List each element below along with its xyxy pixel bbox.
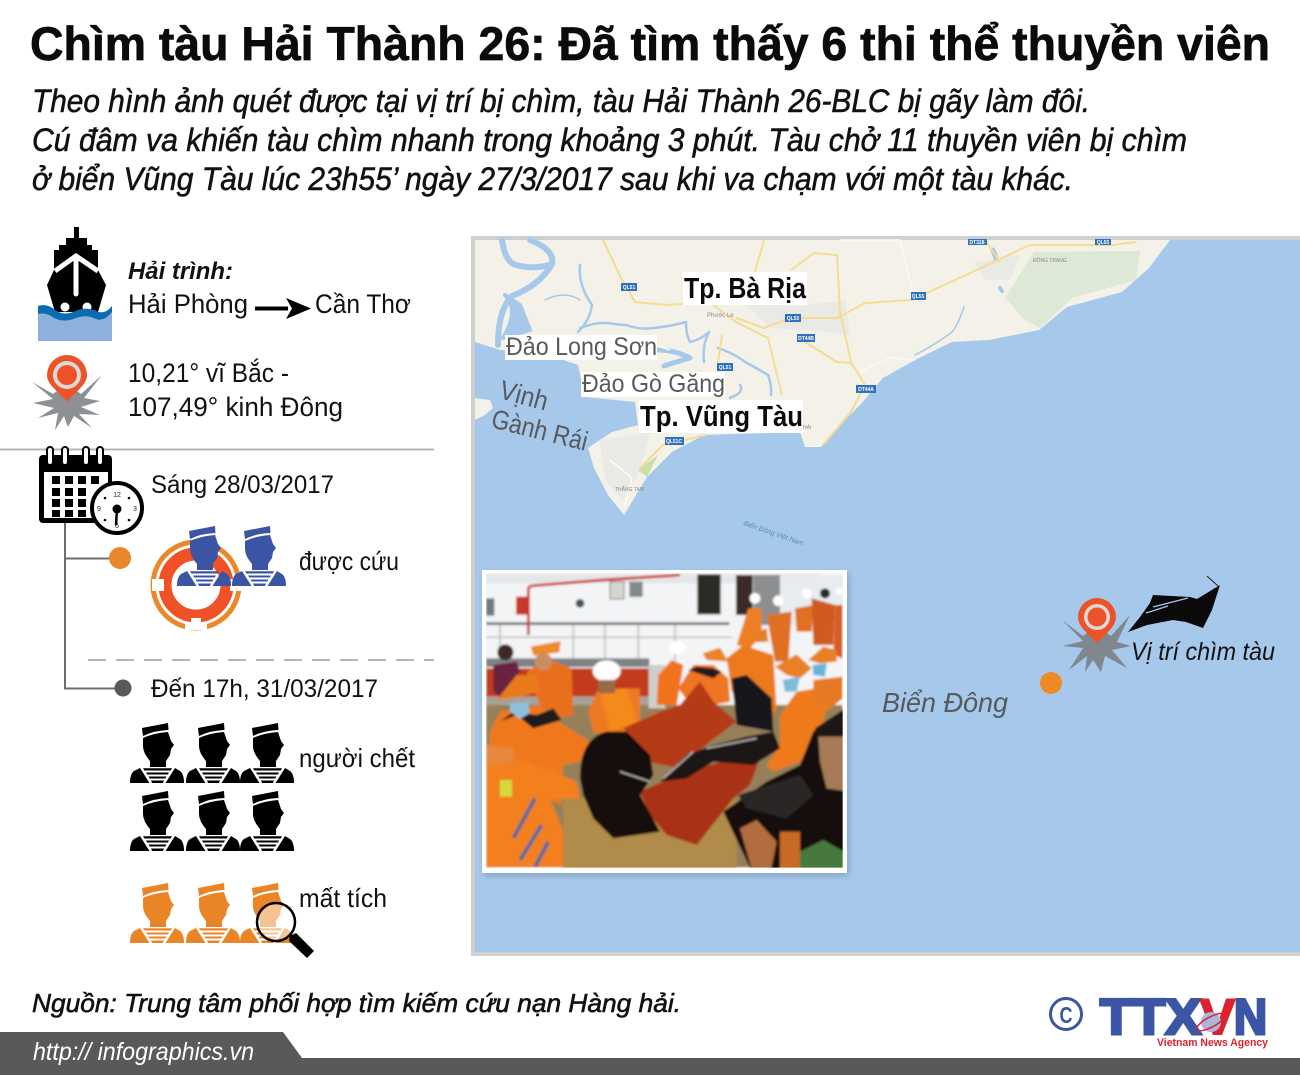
road shields: QL55: [787, 316, 799, 322]
middle man: [588, 688, 657, 733]
date: evening: Đến 17h, 31/03/2017: [151, 675, 378, 703]
icon: calendar and clock: 3: [133, 506, 137, 513]
small sea label: Biển Đông Việt Nam: [742, 519, 805, 548]
front-bottom left: [486, 760, 580, 868]
icon: location pin: [32, 355, 102, 430]
logo: TTXVN: Vietnam News Agency: [1157, 1037, 1269, 1049]
intro text block: [32, 83, 1187, 197]
road shields: QL51: [623, 285, 635, 291]
route to: Cần Thơ: [315, 289, 411, 319]
route label: Hải trình:: [128, 258, 233, 285]
panel: map: [473, 238, 1300, 954]
front left man: [490, 705, 590, 805]
label: Tp. Vũng Tàu: Tp. Vũng Tàu: [640, 401, 803, 433]
logo: TTXVN: V: [1200, 989, 1236, 1045]
beach park: [638, 455, 658, 477]
left crew: [493, 662, 520, 698]
label: Vịnh: Vịnh: [496, 375, 552, 416]
label: Đảo Gò Găng: Đảo Gò Găng: [582, 370, 725, 398]
icon: calendar and clock: 6: [115, 523, 119, 530]
label: dead: người chết: [299, 743, 416, 773]
label: Tp. Bà Rịa: Tp. Bà Rịa: [684, 273, 807, 305]
cameraman: [722, 729, 843, 868]
right crew: [767, 688, 827, 772]
logo: TTXVN: TTX: [1100, 989, 1201, 1045]
map land: [475, 240, 1170, 515]
icon: wreck location pin: [1062, 598, 1131, 672]
small map labels: Phước Le: [707, 313, 734, 319]
road shields: QL51: [719, 365, 731, 371]
road shields: QL55: [1097, 240, 1109, 246]
intro text block: Cú đâm va khiến tàu chìm nhanh trong khoảng 3 phút. Tàu chở 11 thuyền viên bị chìm: [32, 122, 1187, 158]
small map labels: THẮNG TAM: [615, 485, 644, 493]
ship detail: [486, 622, 729, 625]
intro text block: Theo hình ảnh quét được tại vị trí bị chìm, tàu Hải Thành 26-BLC bị gãy làm đôi.: [32, 83, 1090, 119]
timeline connector: [65, 523, 123, 688]
small map labels: HẢI: [803, 424, 811, 431]
map island: [475, 398, 493, 420]
centre crew: [657, 660, 683, 705]
label: rescued: được cứu: [299, 546, 399, 576]
coordinates text: [128, 357, 343, 422]
panel: rescue photo: [480, 565, 850, 876]
label: wreck location: Vị trí chìm tàu: [1131, 638, 1275, 666]
timeline dot: morning: [109, 547, 131, 569]
map rivers: [498, 240, 1002, 398]
road shields: QL55: [912, 294, 924, 300]
small map labels: [615, 257, 1067, 493]
label: missing: mất tích: [299, 883, 387, 913]
red body bags: [623, 682, 737, 768]
label: Đảo Long Sơn: Đảo Long Sơn: [506, 333, 657, 361]
icon: ship on water: [38, 227, 112, 341]
label: Biển Đông: Biển Đông: [882, 687, 1008, 718]
arrow: route: [255, 298, 311, 319]
logo: TTXVN: [1100, 989, 1269, 1049]
icon: rescued sailors: [177, 526, 286, 586]
coordinates text: 107,49° kinh Đông: [128, 392, 343, 422]
icon: sunken ship: [1128, 576, 1220, 632]
title: Chìm tàu Hải Thành 26: Đã tìm thấy 6 thi thể thuyền viên: [30, 17, 1270, 70]
source: Nguồn: Trung tâm phối hợp tìm kiếm cứu nạn Hàng hải.: [32, 988, 681, 1018]
icon: calendar and clock: 12: [113, 492, 121, 499]
label: Gành Rái: Gành Rái: [489, 404, 591, 457]
icon: missing sailors: [130, 883, 294, 943]
road shields: DT328: [969, 240, 985, 246]
icon: calendar and clock: 9: [97, 506, 101, 513]
date: morning: Sáng 28/03/2017: [151, 471, 334, 499]
icon: calendar and clock: [39, 447, 142, 533]
logo: TTXVN: N: [1234, 989, 1267, 1045]
crew on upper deck: [737, 608, 762, 648]
icon: copyright: C: [1060, 1002, 1072, 1028]
intro text block: ở biển Vũng Tàu lúc 23h55’ ngày 27/3/2017 sau khi va chạm với một tàu khác.: [32, 161, 1073, 197]
road shields: [621, 239, 1111, 445]
coordinates text: 10,21° vĩ Bắc -: [128, 357, 289, 388]
timeline dot: evening: [114, 680, 132, 696]
icon: magnifier: [257, 903, 314, 958]
map green area: [1005, 251, 1140, 328]
map roads: [603, 240, 1136, 468]
orange dot on map: [1040, 672, 1062, 694]
icon: dead sailors: [130, 723, 294, 851]
footer url: http:// infographics.vn: [33, 1038, 254, 1066]
route from: Hải Phòng: [128, 289, 248, 319]
road shields: QL51C: [666, 439, 682, 445]
road shields: DT44A: [858, 387, 874, 393]
footer bar: [0, 1032, 1300, 1075]
map white roads: [610, 240, 915, 505]
icon: lifebuoy: [152, 542, 242, 630]
icon: copyright: [1050, 998, 1082, 1030]
map city areas: [600, 255, 1020, 500]
road shields: DT44B: [798, 336, 814, 342]
small map labels: ĐỒNG TRANG: [1033, 257, 1067, 264]
